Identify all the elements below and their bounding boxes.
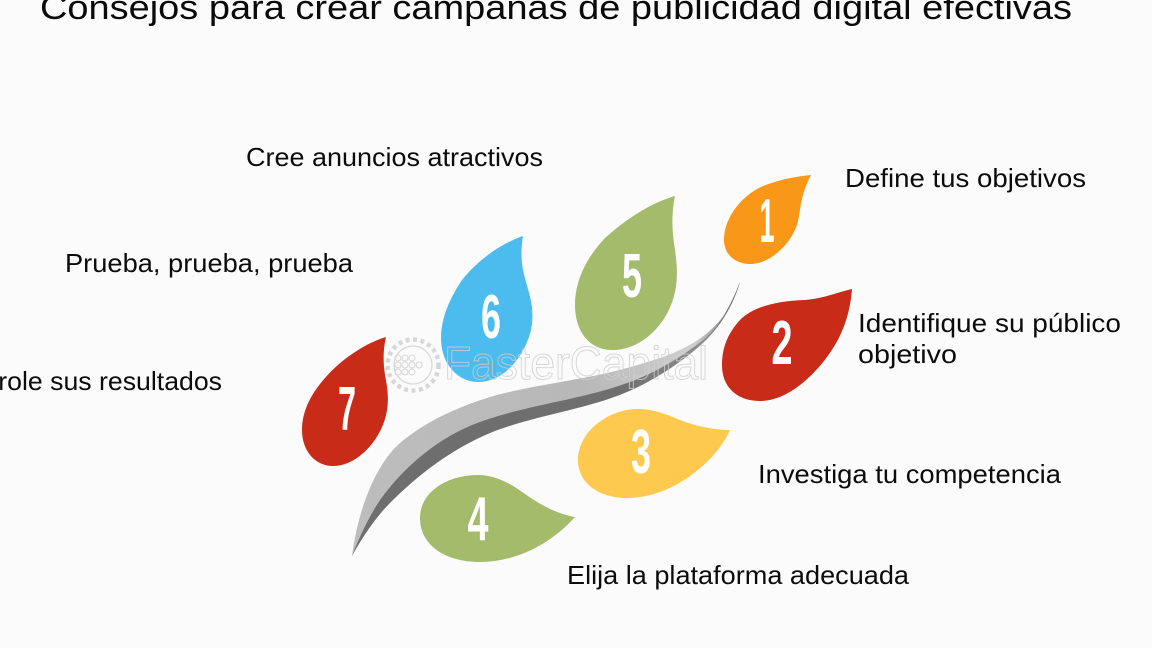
drop 1: orange (724, 175, 811, 264)
label 4: Elija la plataforma adecuada (567, 560, 910, 590)
drop 1: orange: 1 (760, 187, 774, 256)
label 2: objetivo (858, 339, 957, 369)
drop 5: green (575, 196, 677, 350)
drop 2: red: 2 (772, 309, 792, 378)
drop 4: green (420, 475, 575, 562)
label 2: Identifique su público (858, 308, 1121, 338)
drop 2: red (722, 289, 852, 401)
label 1: Define tus objetivos (845, 163, 1086, 193)
label 6: Prueba, prueba, prueba (65, 248, 354, 278)
watermark: FasterCapital: FasterCapital (444, 337, 708, 389)
drop 7: red: 7 (338, 375, 356, 444)
drop 4: green: 4 (468, 485, 489, 554)
drop 5: green: 5 (622, 242, 642, 311)
label 5: Cree anuncios atractivos (246, 142, 543, 172)
label 2 (858, 308, 1121, 369)
drop 7: red (302, 337, 388, 466)
drop 3: yellow (578, 409, 730, 498)
drop 6: blue: 6 (481, 283, 501, 352)
label 3: Investiga tu competencia (758, 459, 1062, 489)
swoosh: curved stem (352, 282, 740, 556)
drop 3: yellow: 3 (631, 418, 651, 487)
drop 6: blue (441, 236, 532, 382)
